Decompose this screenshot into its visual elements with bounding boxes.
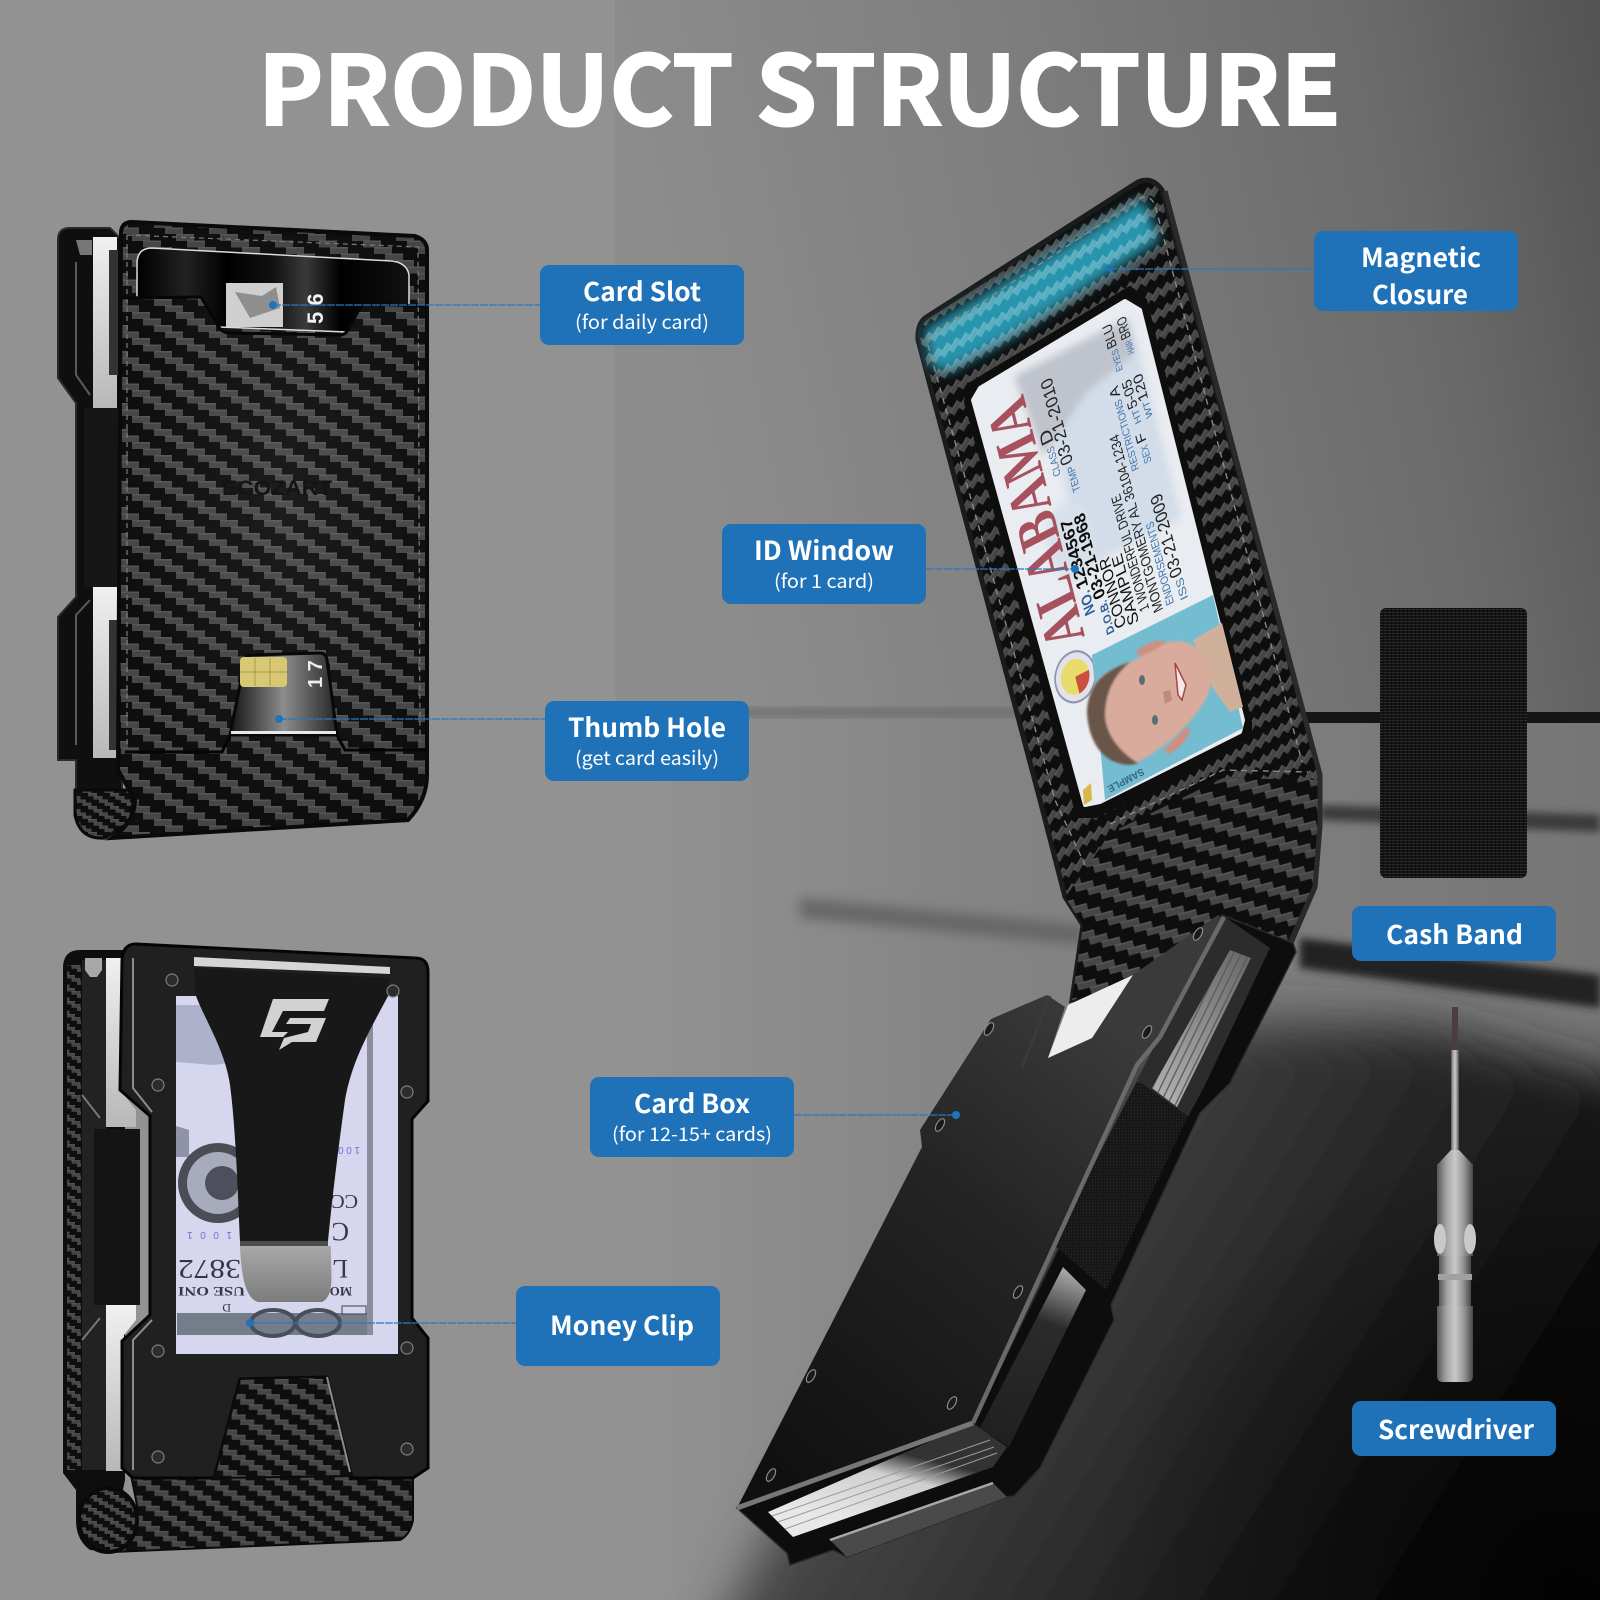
- callout: cash band: [1352, 906, 1556, 961]
- callout: thumb hole: Thumb Hole: [568, 708, 726, 745]
- licence printing: SEX: [1139, 442, 1154, 465]
- callout: screwdriver: Screwdriver: [1378, 1410, 1535, 1447]
- licence printing: F: [1133, 429, 1150, 446]
- rail highlights: [76, 240, 92, 745]
- licence printing: BRO: [1114, 313, 1134, 342]
- product: open wallet with ID flap and card box: [737, 180, 1320, 1565]
- callout: magnetic closure: [1106, 231, 1518, 312]
- licence printing: TEMP: [1066, 463, 1083, 494]
- flap lower panel: [1065, 778, 1318, 1000]
- banknote: C: [332, 1217, 349, 1246]
- card peeking from box: [1048, 975, 1133, 1058]
- licence printing: RESTRICTIONS: [1113, 397, 1142, 473]
- bottom carbon wrap: [112, 1470, 413, 1552]
- banknote: D: [222, 1301, 231, 1315]
- callout: ID window: (for 1 card): [774, 567, 874, 594]
- product: wallet back view with money clip: [63, 944, 428, 1552]
- aluminium card box plate: [737, 915, 1226, 1508]
- licence printing: 5-05: [1120, 376, 1141, 412]
- lower pocket seam: [125, 735, 427, 752]
- callout: card slot: Card Slot: [583, 272, 701, 309]
- magnetic closure glow: [923, 198, 1160, 373]
- white cards peeking out: [93, 237, 118, 758]
- thumb hole showing card: [230, 653, 337, 735]
- lower card ribs: [980, 1267, 1086, 1447]
- callout: magnetic closure: Magnetic: [1361, 238, 1481, 275]
- callout: cash band: Cash Band: [1386, 915, 1523, 952]
- card stack: [768, 1423, 1007, 1537]
- banknote: CC: [331, 1190, 358, 1212]
- left metal rail: [58, 228, 122, 800]
- licence printing: 03-21-1968: [1070, 510, 1109, 603]
- callout: screwdriver: [1352, 1401, 1556, 1456]
- callout: card box: [590, 1077, 960, 1157]
- plate slit: [1022, 996, 1050, 1068]
- licence printing: NO.: [1077, 587, 1098, 618]
- product: wallet front view: [58, 222, 427, 838]
- banknote: 1 0 0 1: [187, 1229, 232, 1240]
- callout: card box: Card Box: [634, 1084, 750, 1121]
- accessory: cash band: [1380, 608, 1527, 878]
- licence printing: D.O.B.: [1097, 598, 1117, 637]
- daily card in slot: 5 6: [303, 293, 328, 324]
- carbon body: [112, 222, 427, 838]
- banknote: USE ONI: [178, 1284, 245, 1299]
- banknote: L: [332, 1254, 348, 1283]
- licence printing: BLU: [1100, 321, 1120, 352]
- thumb hole showing card: 1 7: [305, 660, 327, 688]
- daily card in slot: [137, 248, 409, 332]
- licence printing: CONNOR: [1095, 554, 1130, 632]
- licence printing: [970, 313, 1212, 716]
- callout: card box: (for 12-15+ cards): [612, 1120, 772, 1147]
- licence printing: CLASS: [1046, 444, 1063, 478]
- embossed logo: ECOZART: [222, 477, 332, 500]
- licence printing: SAMPLE: [1108, 551, 1142, 629]
- licence printing: ENDORSEMENTS: [1144, 519, 1176, 608]
- callout: card slot: [269, 265, 744, 345]
- licence printing: MONTGOMERY AL 36104-1234: [1107, 431, 1166, 615]
- licence printing: ALABAMA: [975, 387, 1097, 661]
- brand logo on clip: [260, 999, 329, 1050]
- lower rail highlight: [830, 1483, 1007, 1557]
- licence printing: EYES: [1110, 347, 1125, 373]
- ID window frame: [966, 288, 1250, 816]
- banknote: 1 0 0: [338, 1144, 360, 1155]
- carbon flap: [918, 180, 1320, 1000]
- licence printing: D: [1036, 425, 1058, 449]
- licence photo: SAMPLE: [1105, 765, 1146, 794]
- banknote: 3872: [178, 1254, 241, 1284]
- white cards side: [106, 958, 136, 1471]
- plate screws: [152, 974, 413, 1463]
- callout: ID window: [722, 524, 1079, 604]
- cash band side: [94, 1129, 140, 1305]
- carbon through thumb cutout: [214, 1377, 352, 1478]
- callout: thumb hole: [275, 701, 749, 781]
- side panel body: [1137, 915, 1270, 1117]
- top stitching: [127, 235, 420, 745]
- licence printing: WT: [1141, 398, 1155, 420]
- callout: money clip: Money Clip: [550, 1306, 694, 1343]
- licence printing: HAIR: [1124, 337, 1137, 356]
- elastic band side: [84, 408, 120, 587]
- curled bottom loop: [75, 790, 135, 838]
- flap outer edge: [1165, 191, 1320, 943]
- banknote: MO: [330, 1284, 352, 1299]
- callout: ID window: ID Window: [754, 531, 894, 568]
- bottom loop: [79, 1488, 137, 1552]
- pocket edge: [120, 297, 426, 335]
- flap stitching: [928, 197, 1308, 865]
- back rail: [63, 950, 125, 1552]
- plate bevel highlights: [133, 958, 350, 1472]
- licence printing: A: [1107, 382, 1124, 401]
- money clip: [194, 957, 390, 1302]
- licence printing: 03-21-2010: [1038, 374, 1077, 469]
- title: PRODUCT STRUCTURE: [258, 14, 1341, 153]
- callout: card slot: (for daily card): [575, 308, 709, 335]
- licence printing: 03-21-2009: [1148, 490, 1186, 581]
- outer box rail: [737, 915, 1296, 1565]
- licence photo: [1083, 595, 1243, 805]
- callout: magnetic closure: Closure: [1372, 275, 1468, 312]
- licence printing: 1 WONDERFUL DRIVE: [1109, 491, 1153, 614]
- accessory: screwdriver: [1434, 1007, 1476, 1382]
- licence printing: 120: [1131, 370, 1152, 404]
- callout: thumb hole: (get card easily): [575, 744, 719, 771]
- inner rail and wedge: [82, 958, 106, 1470]
- metal plate: [120, 944, 428, 1478]
- licence printing: HT: [1130, 406, 1144, 426]
- textured side panel: [1053, 1081, 1188, 1290]
- licence printing: 1234567: [1057, 515, 1092, 593]
- callout: money clip: [246, 1286, 720, 1366]
- upper silver card ribs: [1152, 950, 1251, 1107]
- licence printing: ISS: [1173, 575, 1191, 603]
- driver licence: [970, 301, 1243, 805]
- box screws: [764, 926, 1205, 1483]
- banknote: [176, 996, 398, 1354]
